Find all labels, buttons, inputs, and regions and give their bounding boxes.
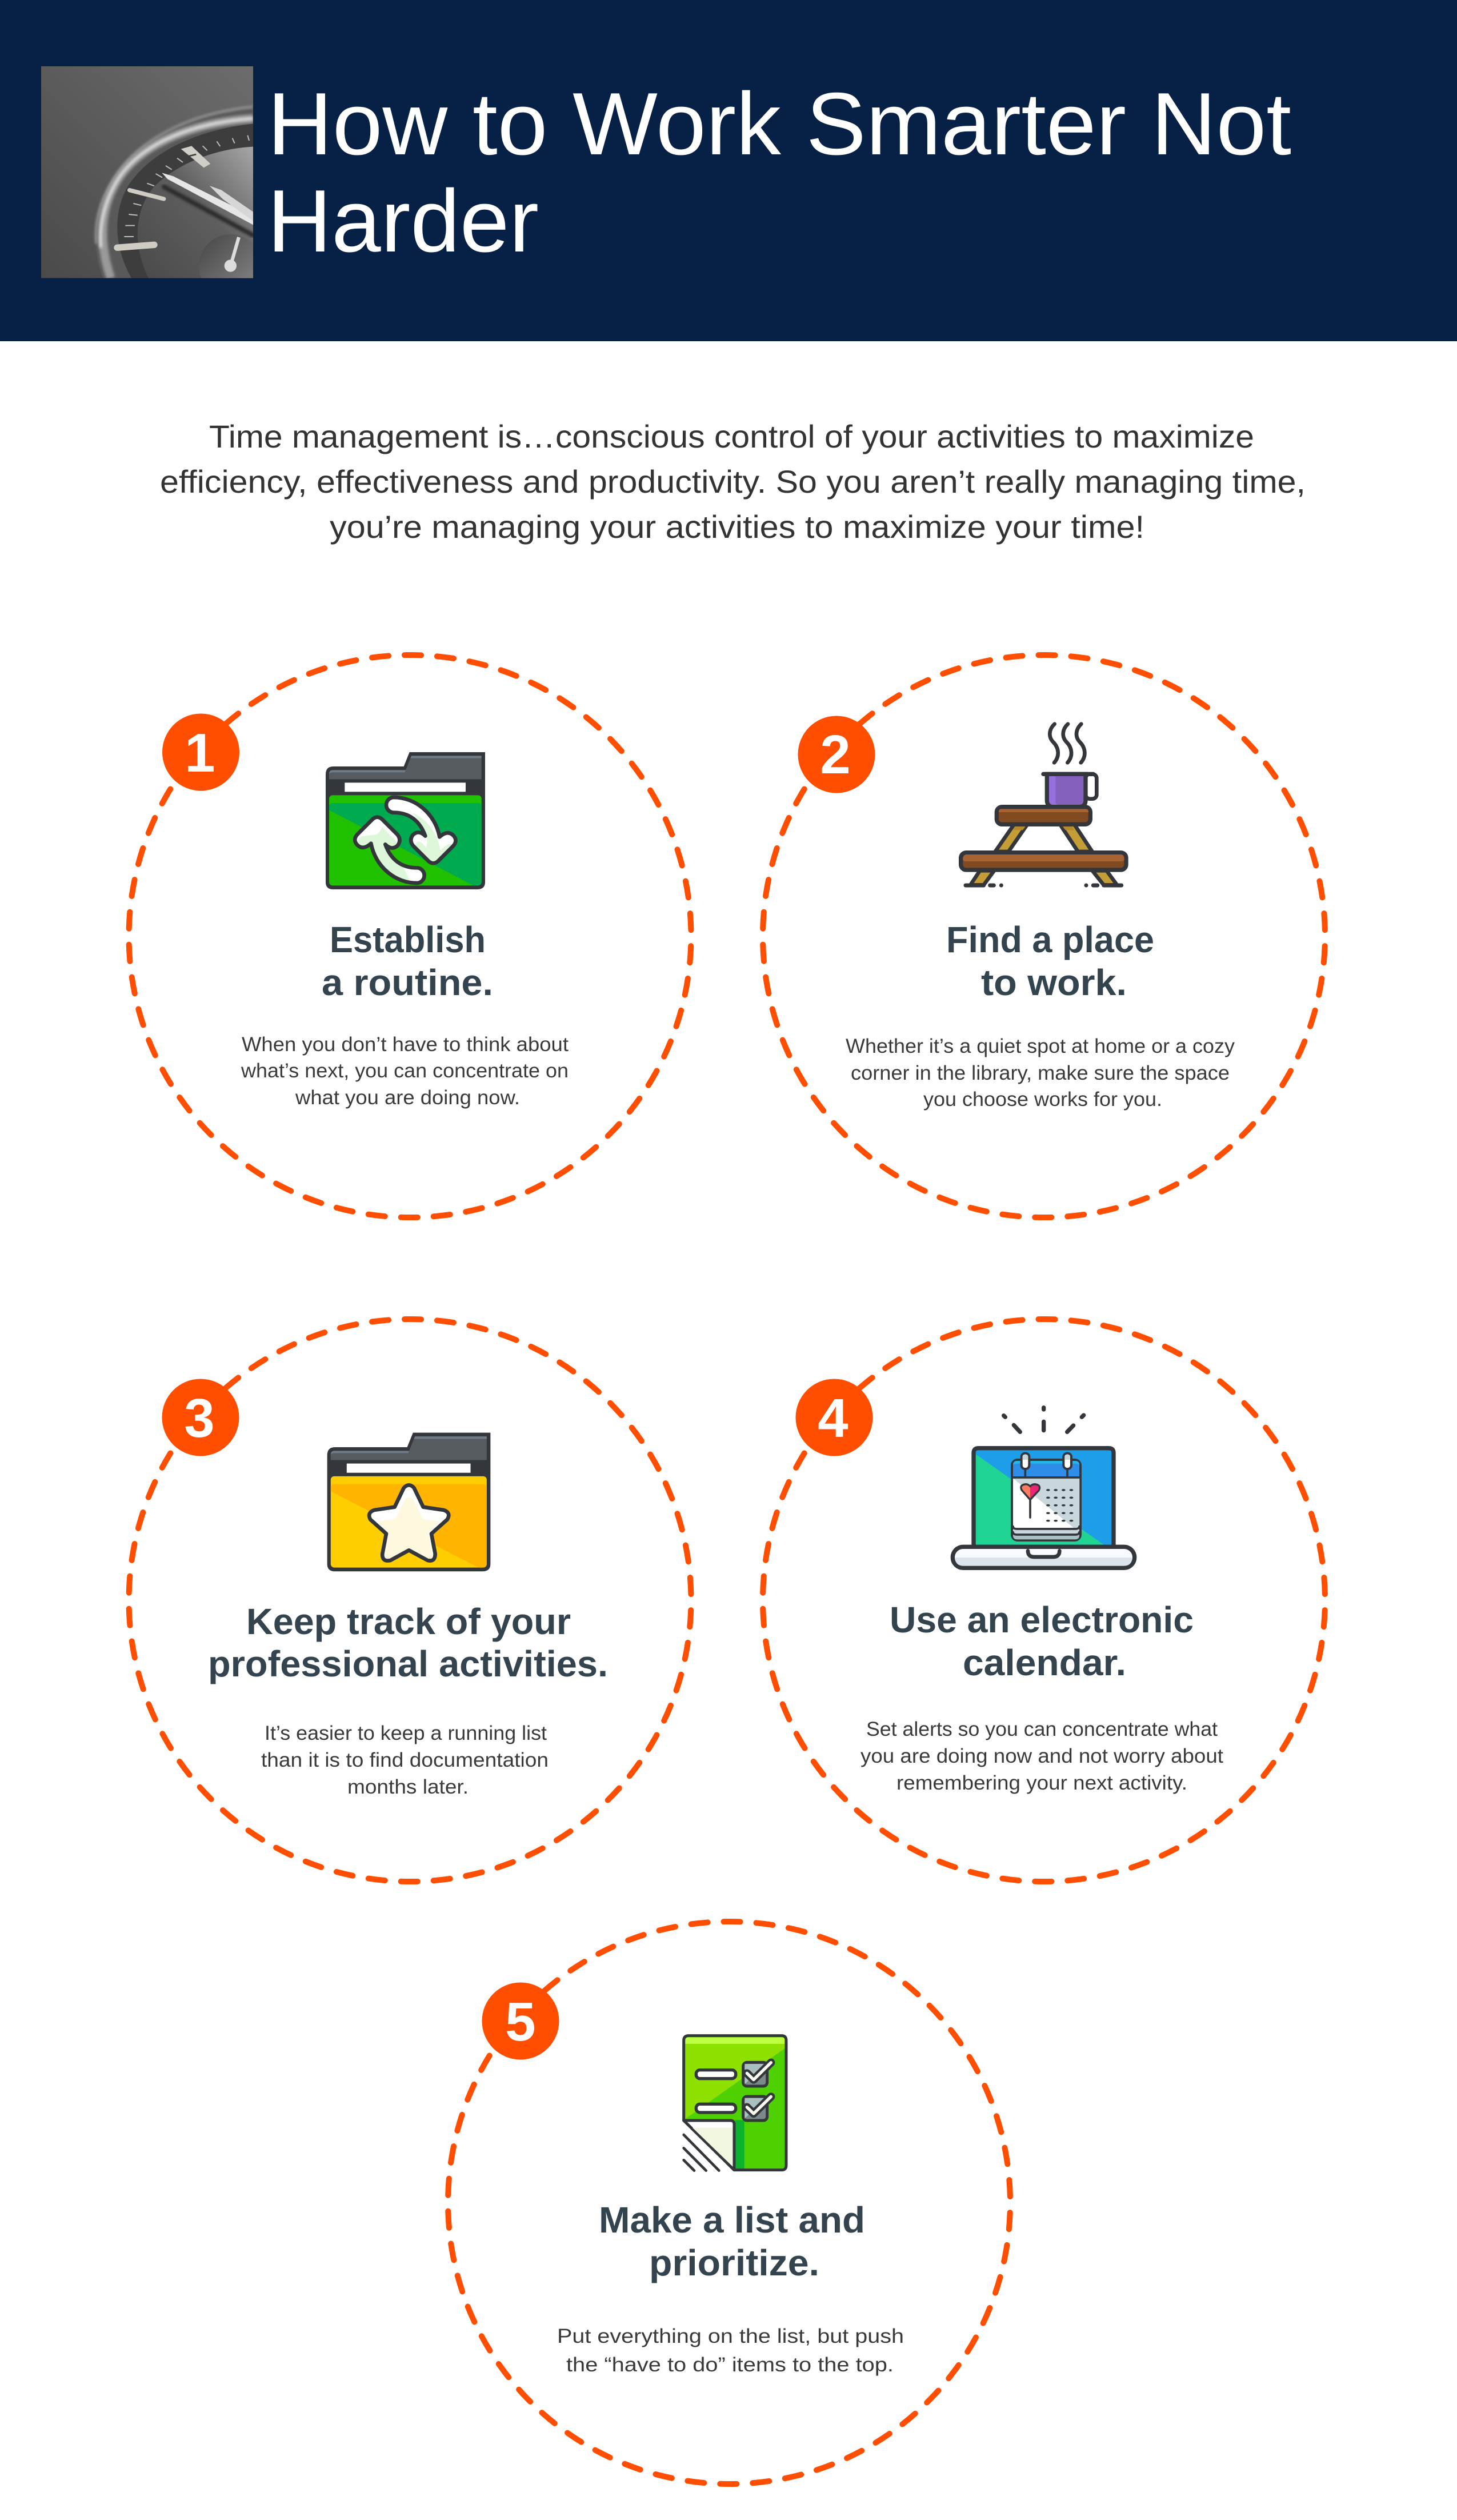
dashed circle — [647, 1204, 1440, 1997]
title: Harder — [267, 171, 539, 270]
icon: yellow folder with star — [327, 1433, 490, 1571]
intro text: you’re managing your activities to maximize your time! — [330, 509, 1144, 545]
number badge 5: 5 — [505, 1991, 536, 2052]
panel: step 4 use an electronic calendar — [647, 1204, 1440, 1997]
body text: you are doing now and not worry about — [860, 1745, 1223, 1767]
body text: months later. — [347, 1776, 469, 1798]
title: How to Work Smarter Not — [267, 74, 1291, 173]
dashed circle — [13, 1204, 807, 1997]
body text — [241, 1033, 569, 1109]
body text: what’s next, you can concentrate on — [241, 1060, 569, 1082]
body text: remembering your next activity. — [896, 1772, 1187, 1794]
number badge 1: 1 — [185, 722, 215, 784]
dashed circle — [333, 1806, 1126, 2520]
heading — [208, 1601, 608, 1684]
body text: corner in the library, make sure the space — [851, 1062, 1230, 1084]
body text: than it is to find documentation — [261, 1749, 549, 1771]
heading: to work. — [981, 962, 1127, 1003]
intro text: efficiency, effectiveness and productivity. So you aren’t really managing time, — [160, 464, 1306, 500]
body text — [261, 1722, 549, 1798]
body text — [846, 1035, 1235, 1111]
panel: step 3 keep track of your professional activities — [13, 1204, 807, 1997]
body text: Put everything on the list, but push — [557, 2325, 904, 2347]
number badge 3: 3 — [184, 1388, 215, 1449]
body text: what you are doing now. — [295, 1087, 520, 1109]
icon: green folder with cycle arrows — [326, 752, 485, 889]
title — [267, 74, 1291, 270]
heading — [322, 919, 493, 1003]
heading: Find a place — [946, 919, 1154, 960]
icon: picnic table with steaming mug — [961, 724, 1126, 885]
number badge 4: 4 — [818, 1388, 848, 1449]
panel: step 2 find a place to work — [647, 540, 1440, 1333]
header band — [0, 0, 1457, 341]
number badge 2 — [798, 716, 875, 793]
heading: Establish — [330, 919, 486, 960]
number badge 2: 2 — [820, 724, 851, 785]
heading: Use an electronic — [890, 1599, 1194, 1640]
body text — [557, 2325, 904, 2376]
body text — [860, 1718, 1223, 1794]
panel: step 5 make a list and prioritize — [333, 1806, 1126, 2520]
heading: a routine. — [322, 962, 493, 1003]
body text: It’s easier to keep a running list — [265, 1722, 547, 1744]
dashed circle — [13, 540, 807, 1333]
intro text — [160, 418, 1306, 545]
dashed circle — [647, 540, 1440, 1333]
body text: the “have to do” items to the top. — [566, 2354, 894, 2376]
number badge 1 — [162, 713, 239, 791]
heading: prioritize. — [649, 2242, 819, 2283]
body text: you choose works for you. — [923, 1088, 1162, 1111]
heading: calendar. — [963, 1642, 1126, 1683]
icon: checklist page — [684, 2036, 786, 2171]
number badge 3 — [162, 1379, 239, 1456]
intro text: Time management is…conscious control of your activities to maximize — [209, 418, 1254, 454]
panel: step 1 establish a routine — [13, 540, 807, 1333]
heading — [946, 919, 1154, 1003]
body text: When you don’t have to think about — [242, 1033, 569, 1056]
heading: Keep track of your — [246, 1601, 571, 1642]
icon: laptop with calendar — [952, 1408, 1135, 1568]
photo: watch dial — [41, 66, 253, 278]
heading — [599, 2199, 865, 2283]
body text: Whether it’s a quiet spot at home or a cozy — [846, 1035, 1235, 1057]
heading: professional activities. — [208, 1643, 608, 1684]
number badge 4 — [795, 1379, 873, 1456]
body text: Set alerts so you can concentrate what — [866, 1718, 1218, 1740]
number badge 5 — [482, 1982, 559, 2060]
heading — [890, 1599, 1194, 1683]
heading: Make a list and — [599, 2199, 865, 2241]
